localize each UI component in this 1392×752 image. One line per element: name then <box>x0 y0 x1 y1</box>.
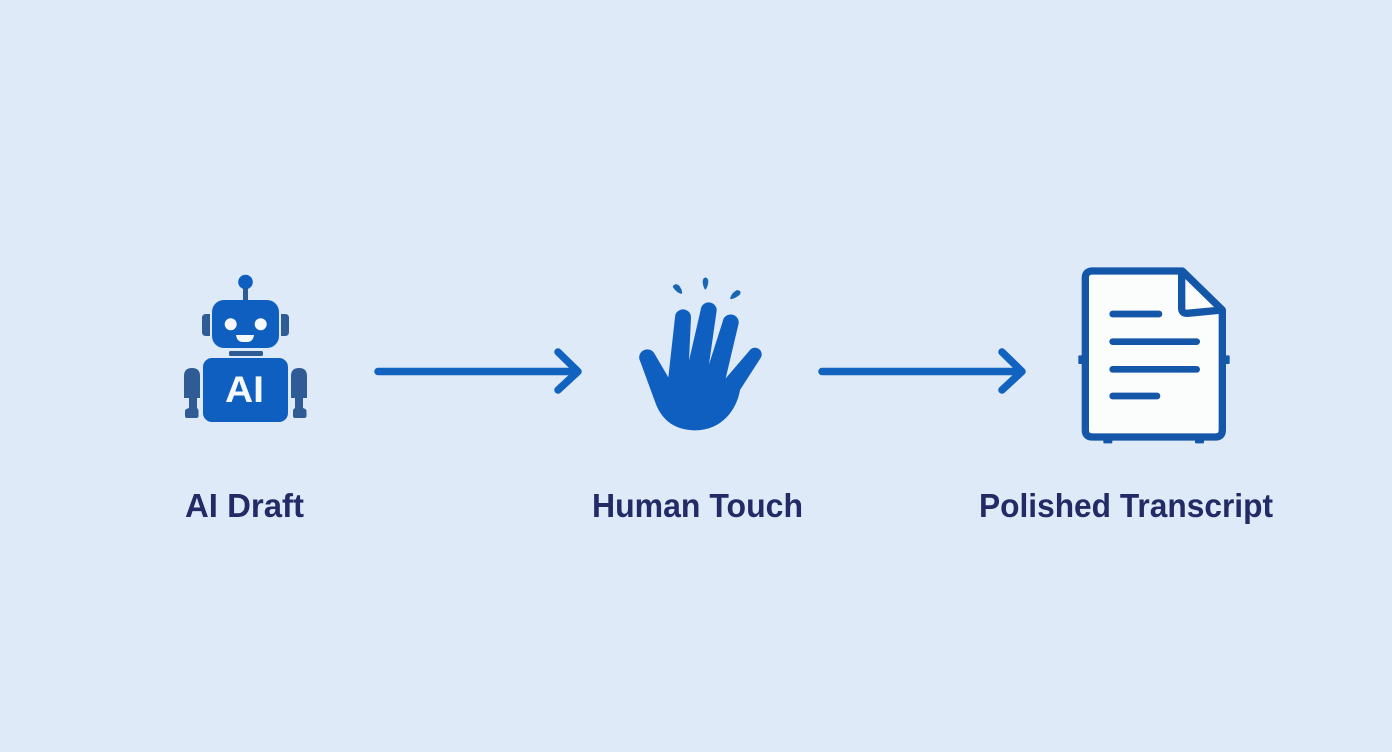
icon: robot <box>184 275 307 422</box>
robot eyes <box>225 318 267 330</box>
document text lines <box>1113 314 1197 396</box>
hand shape <box>639 302 762 430</box>
robot ears <box>202 314 289 336</box>
icon: document <box>1078 271 1230 443</box>
robot body <box>203 358 288 422</box>
document page <box>1085 271 1222 437</box>
label: AI Draft: AI Draft <box>185 487 304 524</box>
robot left arm <box>184 368 200 418</box>
arrow: human touch to polished transcript <box>822 352 1022 390</box>
icon: hand <box>639 278 762 430</box>
document tabs <box>1078 355 1230 443</box>
document fold <box>1182 272 1222 313</box>
hand sparkle marks <box>674 278 740 298</box>
robot head <box>212 300 279 348</box>
robot right arm <box>291 368 307 418</box>
robot mouth <box>236 335 254 342</box>
robot neck <box>229 351 263 356</box>
label: Human Touch: Human Touch <box>592 487 803 524</box>
robot antenna <box>238 275 253 300</box>
label: Polished Transcript: Polished Transcript <box>979 487 1273 524</box>
robot AI label: AI <box>225 369 264 410</box>
arrow: AI draft to human touch <box>378 352 578 390</box>
